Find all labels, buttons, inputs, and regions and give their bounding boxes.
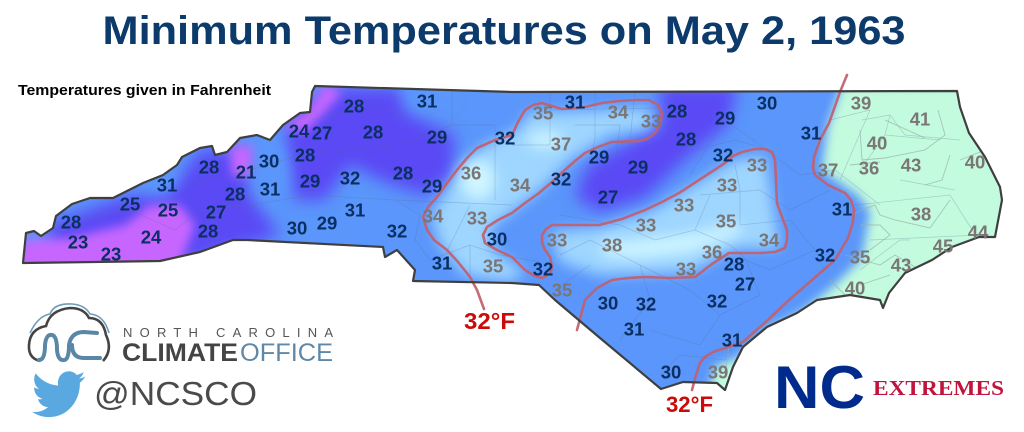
station temperatures above freezing: 44 [968,222,989,242]
station temperatures above freezing: 45 [933,236,953,256]
32°F isotherm contour: central and western [423,100,787,330]
station temperatures below freezing: 27 [598,186,618,208]
station temperatures below freezing: 32 [533,258,553,280]
logo: North Carolina Climate Office [29,304,333,367]
station temperatures below freezing: 29 [715,108,735,128]
station temperatures below freezing: 32 [815,244,835,266]
station temperatures below freezing: 27 [735,274,755,294]
station temperatures above freezing: 40 [845,278,865,298]
station temperatures above freezing: 33 [636,214,656,236]
logo: North Carolina Climate Office: NORTH CAROLINA [123,325,333,340]
station temperatures below freezing: 28 [61,212,81,232]
station temperatures above freezing: 35 [552,280,572,300]
contour label: 32°F west: 32°F [464,308,515,334]
station temperatures below freezing: 23 [101,244,121,264]
station temperatures below freezing: 21 [236,162,256,182]
logo: NC Extremes [774,354,1004,421]
station temperatures below freezing: 28 [667,100,687,122]
station temperatures above freezing: 35 [850,246,870,268]
station temperatures above freezing: 34 [510,174,531,196]
station temperatures above freezing: 43 [891,254,911,276]
station temperatures below freezing: 25 [120,194,140,214]
station temperatures above freezing: 33 [547,230,567,250]
station temperatures above freezing: 35 [716,210,736,232]
station temperatures below freezing: 28 [393,162,413,184]
station temperatures below freezing: 30 [259,150,279,172]
station temperatures below freezing: 32 [551,168,571,190]
station temperatures above freezing: 35 [483,256,503,276]
station temperatures above freezing: 33 [674,194,694,216]
station temperatures below freezing [61,90,852,382]
station temperatures below freezing: 28 [295,144,315,166]
coastal sounds and estuaries [725,110,985,375]
station temperatures above freezing: 39 [851,92,871,114]
station temperatures above freezing: 33 [717,174,737,196]
station temperatures below freezing: 31 [801,122,821,144]
station temperatures below freezing: 29 [300,170,320,192]
station temperatures above freezing: 40 [867,132,887,154]
station temperatures below freezing: 27 [206,202,226,222]
station temperatures below freezing: 31 [832,198,852,220]
station temperatures above freezing: 37 [818,160,838,180]
station temperatures above freezing: 35 [533,102,553,124]
contour label: 32°F coast: 32°F [666,392,713,417]
station temperatures below freezing: 28 [198,220,218,242]
station temperatures below freezing: 28 [363,122,383,142]
station temperatures above freezing [423,92,989,382]
station temperatures below freezing: 30 [757,92,777,114]
station temperatures above freezing: 38 [911,204,931,224]
station temperatures above freezing: 34 [759,230,780,250]
station temperatures below freezing: 31 [157,174,177,196]
station temperatures below freezing: 32 [707,290,727,312]
station temperatures above freezing: 38 [602,234,622,256]
station temperatures above freezing: 36 [859,158,879,178]
station temperatures below freezing: 29 [589,146,609,168]
logo: North Carolina Climate Office: OFFICE [240,339,333,367]
station temperatures below freezing: 31 [260,178,280,200]
station temperatures above freezing: 36 [461,162,481,184]
station temperatures above freezing: 33 [641,110,661,132]
station temperatures below freezing: 31 [432,252,452,274]
station temperatures above freezing: 43 [901,154,921,176]
station temperatures below freezing: 30 [661,362,681,382]
state outline [23,86,1002,390]
station temperatures above freezing: 39 [708,362,728,382]
station temperatures below freezing: 31 [417,90,437,112]
station temperatures above freezing: 33 [747,154,767,176]
station temperatures above freezing: 40 [965,152,985,172]
station temperatures above freezing: 33 [676,258,696,280]
station temperatures below freezing: 27 [312,122,332,144]
station temperatures below freezing: 32 [340,168,360,188]
map: North Carolina temperature field [24,87,1001,388]
station temperatures below freezing: 28 [199,156,219,178]
station temperatures below freezing: 28 [676,128,696,150]
county lines [60,92,985,375]
station temperatures below freezing: 31 [565,92,585,112]
station temperatures below freezing: 30 [287,218,307,238]
station temperatures below freezing: 30 [598,292,618,314]
station temperatures below freezing: 24 [289,120,310,142]
station temperatures above freezing: 41 [910,108,930,130]
station temperatures above freezing: 37 [551,134,571,154]
logo: NC Extremes: NC [774,354,865,421]
station temperatures below freezing: 29 [427,126,447,148]
logo: North Carolina Climate Office: CLIMATE [122,339,238,367]
icon: twitter bird [32,371,85,417]
32°F isotherm contour: coastal [692,75,854,390]
station temperatures above freezing: 34 [423,206,444,226]
station temperatures below freezing: 29 [422,176,442,196]
station temperatures below freezing: 28 [225,184,245,204]
station temperatures below freezing: 32 [713,144,733,166]
station temperatures above freezing: 33 [467,208,487,228]
station temperatures below freezing: 24 [141,226,162,248]
station temperatures below freezing: 31 [345,200,365,220]
station temperatures above freezing: 34 [608,102,629,122]
station temperatures below freezing: 29 [628,156,648,178]
logo: NC Extremes: EXTREMES [873,376,1004,400]
station temperatures below freezing: 25 [158,200,178,220]
map note: temperature units: Temperatures given in Fahrenheit [18,82,271,99]
station temperatures below freezing: 28 [344,96,364,116]
station temperatures below freezing: 32 [636,294,656,314]
title: Minimum Temperatures on May 2, 1963 [102,9,906,53]
station temperatures below freezing: 29 [317,212,337,234]
twitter handle: @NCSCO [94,375,257,412]
station temperatures below freezing: 30 [487,228,507,250]
station temperatures above freezing: 36 [702,242,722,262]
station temperatures below freezing: 23 [68,232,88,252]
station temperatures below freezing: 31 [722,330,742,350]
station temperatures below freezing: 32 [387,220,407,242]
station temperatures below freezing: 28 [724,254,744,274]
station temperatures below freezing: 32 [495,128,515,148]
station temperatures below freezing: 31 [624,318,644,340]
